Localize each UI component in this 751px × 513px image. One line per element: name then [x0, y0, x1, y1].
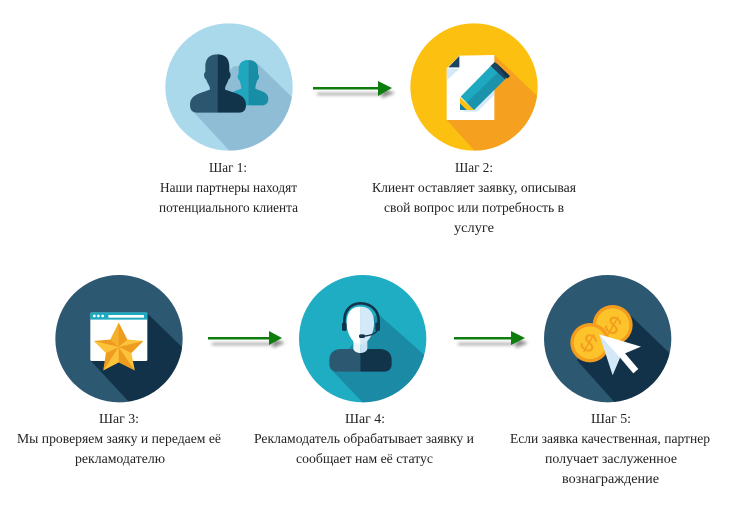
caption: step 3: рекламодателю: [75, 452, 165, 467]
caption: step 2: услуге: [454, 221, 494, 236]
arrow: step 1 to step 2: [313, 81, 395, 98]
coin dollar signs: [575, 310, 626, 359]
icon: document and pencil: [410, 23, 543, 157]
step 1: [159, 23, 299, 216]
coin dollar signs: $: [575, 328, 602, 359]
caption: step 1: Шаг 1:: [209, 161, 247, 176]
caption: step 5: получает заслуженное: [545, 452, 677, 467]
step 5: [510, 275, 710, 487]
caption: step 4: Шаг 4:: [345, 412, 385, 427]
caption: step 1: потенциального клиента: [159, 201, 299, 216]
icon: partners silhouettes: [165, 23, 297, 157]
caption: step 5: Шаг 5:: [591, 412, 631, 427]
caption: step 3: Шаг 3:: [99, 412, 139, 427]
caption: step 2: Клиент оставляет заявку, описывая: [372, 181, 577, 196]
coin dollar signs: $: [600, 310, 626, 342]
caption: step 1: Наши партнеры находят: [160, 181, 297, 196]
arrow: step 3 to step 4: [208, 331, 285, 348]
icon: support operator with headset: [299, 275, 430, 408]
caption: step 4: [254, 412, 474, 467]
caption: step 5: Если заявка качественная, партнер: [510, 432, 710, 447]
icon: browser window with star: [55, 275, 187, 408]
step 3: [17, 275, 221, 467]
arrow: step 4 to step 5: [454, 331, 528, 348]
caption: step 1: [159, 161, 299, 216]
caption: step 2: свой вопрос или потребность в: [384, 201, 564, 216]
caption: step 3: [17, 412, 221, 467]
caption: step 2: Шаг 2:: [455, 161, 493, 176]
step 4: [254, 275, 474, 467]
caption: step 5: [510, 412, 710, 487]
caption: step 2: [372, 161, 577, 236]
caption: step 3: Мы проверяем заяку и передаем её: [17, 432, 221, 447]
caption: step 4: Рекламодатель обрабатывает заявку и: [254, 432, 474, 447]
caption: step 4: сообщает нам её статус: [296, 452, 433, 467]
caption: step 5: вознаграждение: [562, 472, 659, 487]
icon: coins and cursor: [544, 275, 675, 408]
step 2: [372, 23, 577, 236]
